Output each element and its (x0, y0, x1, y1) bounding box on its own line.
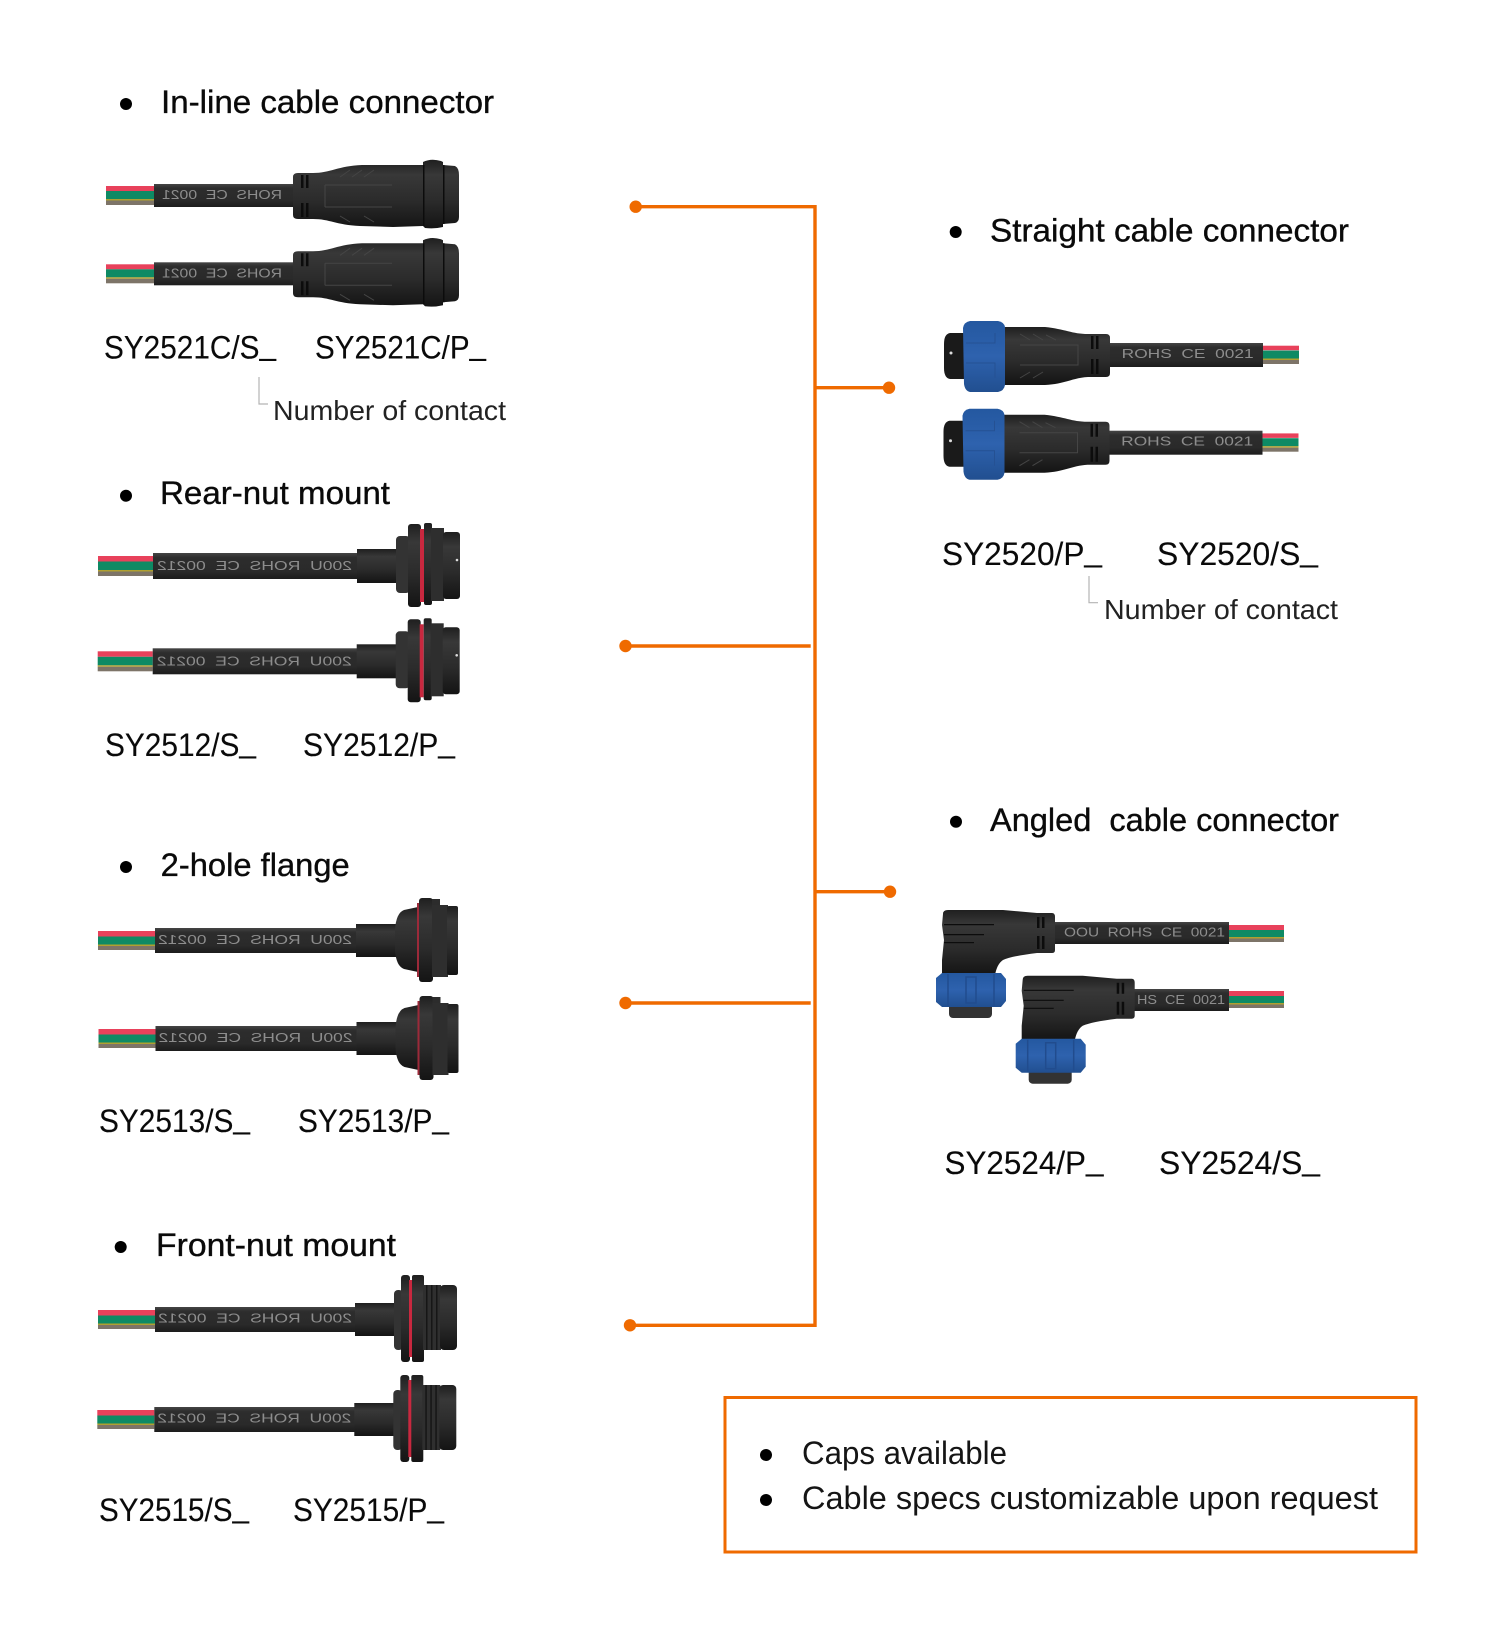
part number plug: SY2513/P (298, 1103, 442, 1139)
part number plug: _ (437, 723, 456, 759)
connector photo: flange socket: 200U ROHS CE 00212 (158, 932, 352, 947)
connector photo: flange plug (98, 996, 458, 1080)
connector photo: front-nut socket (98, 1275, 457, 1362)
part number plug: _ (1085, 1141, 1105, 1177)
connector photo: rear-nut socket: 200U ROHS CE 00212 (157, 558, 352, 573)
panel: in-line cable connector (104, 84, 506, 426)
part number plug: SY2524/P (944, 1145, 1089, 1181)
connector photo: flange plug: 200U ROHS CE 00212 (158, 1030, 352, 1045)
connector photo: straight plug (944, 321, 1299, 392)
connector photo: angled plug (936, 910, 1284, 1018)
connector photo: in-line plug: ROHS CE 0021 (162, 265, 282, 280)
connector photo: straight plug: ROHS CE 0021 (1122, 346, 1254, 361)
part number plug: _ (469, 326, 487, 362)
panel: angled cable connector (936, 802, 1339, 1181)
heading: straight cable connector: Straight cable connector (990, 213, 1349, 249)
panel: straight cable connector (942, 213, 1349, 625)
bullet: caps available: Caps available (802, 1435, 1007, 1471)
connector photo: rear-nut plug (98, 618, 460, 702)
connector photo: in-line socket (106, 160, 459, 228)
connector photo: front-nut socket: 200U ROHS CE 00212 (158, 1311, 352, 1326)
part number plug: _ (426, 1488, 445, 1524)
connector photo: flange socket (98, 898, 458, 982)
connector photo: in-line socket: ROHS CE 0021 (162, 187, 282, 202)
connector photo: in-line plug (106, 238, 459, 307)
heading: rear-nut mount: Rear-nut mount (160, 475, 390, 511)
part number socket: SY2520/S (1157, 536, 1301, 572)
part number socket: _ (1299, 532, 1319, 568)
annotation: number of contact (259, 377, 506, 426)
connector photo: angled socket (1016, 976, 1284, 1084)
part number socket: SY2521C/S (104, 330, 271, 366)
panel: 2-hole flange (98, 847, 458, 1139)
heading: 2-hole flange: 2-hole flange (161, 847, 350, 883)
part number socket: _ (232, 1099, 251, 1135)
connector photo: straight socket: ROHS CE 0021 (1121, 434, 1253, 449)
bullet: cable specs customizable: Cable specs customizable upon request (802, 1480, 1378, 1516)
part number socket: SY2524/S (1159, 1145, 1303, 1181)
part number plug: SY2512/P (303, 727, 447, 763)
part number socket: SY2515/S (99, 1492, 243, 1528)
part number socket: SY2512/S (105, 727, 249, 763)
part number socket: SY2513/S (99, 1103, 243, 1139)
callout: options box (725, 1398, 1416, 1552)
annotation: number of contact: Number of contact (273, 395, 506, 426)
heading: in-line cable connector: In-line cable connector (161, 84, 494, 120)
panel: front-nut mount (97, 1227, 457, 1528)
annotation: number of contact (1089, 576, 1338, 625)
orange connector tree (619, 200, 896, 1332)
part number plug: SY2515/P (293, 1492, 437, 1528)
connector photo: angled socket: HS CE 0021 (1137, 992, 1225, 1007)
connector photo: front-nut plug: 200U ROHS CE 00212 (157, 1411, 351, 1426)
part number plug: _ (431, 1099, 450, 1135)
part number plug: _ (1083, 532, 1103, 568)
part number socket: _ (1301, 1141, 1321, 1177)
part number socket: _ (232, 1488, 250, 1524)
connector photo: rear-nut plug: 200U ROHS CE 00212 (157, 653, 352, 668)
connector photo: rear-nut socket (98, 523, 460, 607)
part number plug: SY2521C/P (315, 330, 482, 366)
part number socket: _ (259, 326, 277, 362)
panel: rear-nut mount (98, 475, 460, 763)
connector photo: front-nut plug (97, 1375, 456, 1462)
heading: front-nut mount: Front-nut mount (156, 1227, 396, 1263)
heading: angled cable connector: Angled cable connector (990, 802, 1339, 838)
part number plug: SY2520/P (942, 536, 1086, 572)
connector photo: angled plug: OOU ROHS CE 0021 (1064, 925, 1225, 940)
connector photo: straight socket (944, 409, 1298, 480)
part number socket: _ (238, 723, 257, 759)
annotation: number of contact: Number of contact (1104, 594, 1338, 625)
